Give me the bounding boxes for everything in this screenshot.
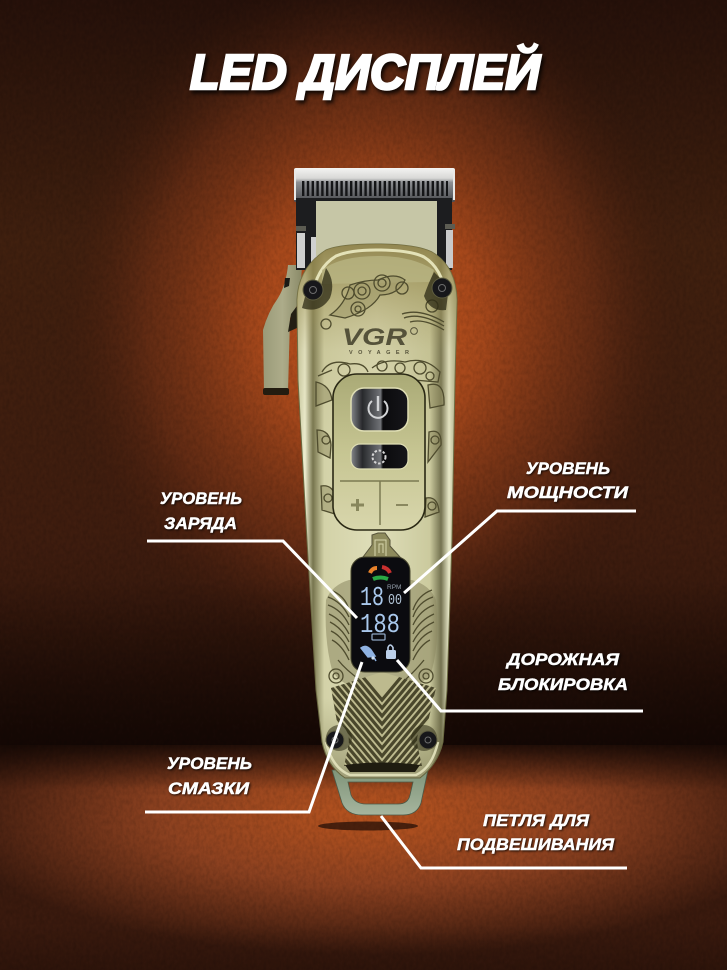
hair clipper illustration — [263, 168, 457, 830]
callout: oil level — [145, 662, 362, 812]
icon: travel lock — [386, 645, 396, 659]
icon: minus — [396, 504, 408, 506]
top bezel — [312, 250, 446, 298]
callout: oil level: УРОВЕНЬ — [167, 754, 252, 773]
callout: travel lock: БЛОКИРОВКА — [498, 675, 628, 694]
callout: oil level: СМАЗКИ — [168, 779, 250, 798]
screws — [302, 268, 452, 751]
battery charge digits: 18 — [360, 584, 384, 614]
callout: hanging loop: ПОДВЕШИВАНИЯ — [457, 835, 615, 854]
engravings around display — [363, 533, 400, 557]
LED display — [351, 557, 410, 672]
callout: battery level: ЗАРЯДА — [164, 514, 237, 533]
blade head — [294, 168, 455, 202]
power level readout: RPM — [387, 584, 401, 591]
callout: travel lock — [397, 650, 643, 711]
icon: power button — [351, 388, 408, 431]
side clip — [263, 265, 302, 392]
LED display: 188 — [360, 611, 400, 641]
callout: power level — [404, 459, 636, 593]
callout: travel lock: ДОРОЖНАЯ — [505, 650, 620, 669]
battery icon — [372, 634, 385, 640]
callout: hanging loop: ПЕТЛЯ ДЛЯ — [483, 811, 590, 830]
chevron engraving — [331, 672, 436, 766]
control panel — [333, 374, 425, 530]
LED display: 00 — [388, 592, 402, 609]
logo: VGR: VGR — [342, 324, 408, 351]
icon: plus — [351, 499, 364, 511]
callout: battery level: УРОВЕНЬ — [160, 489, 242, 508]
floor shadow — [318, 822, 418, 830]
logo: VGR — [342, 324, 417, 356]
callout: battery level — [147, 489, 357, 618]
callout: power level: МОЩНОСТИ — [507, 483, 629, 502]
icon: oil level drop — [361, 646, 376, 661]
logo: VGR: VOYAGER — [349, 350, 409, 356]
icon: mode button — [351, 444, 408, 469]
engraved clouds — [316, 275, 444, 812]
hanging loop — [332, 770, 428, 815]
title: LED ДИСПЛЕЙ — [190, 45, 542, 100]
icon: power level arcs — [370, 567, 390, 579]
callout: hanging loop — [381, 811, 627, 868]
neck plate — [316, 201, 437, 256]
clipper body — [297, 244, 457, 778]
touch keys — [340, 481, 419, 525]
callout: power level: УРОВЕНЬ — [526, 459, 610, 478]
